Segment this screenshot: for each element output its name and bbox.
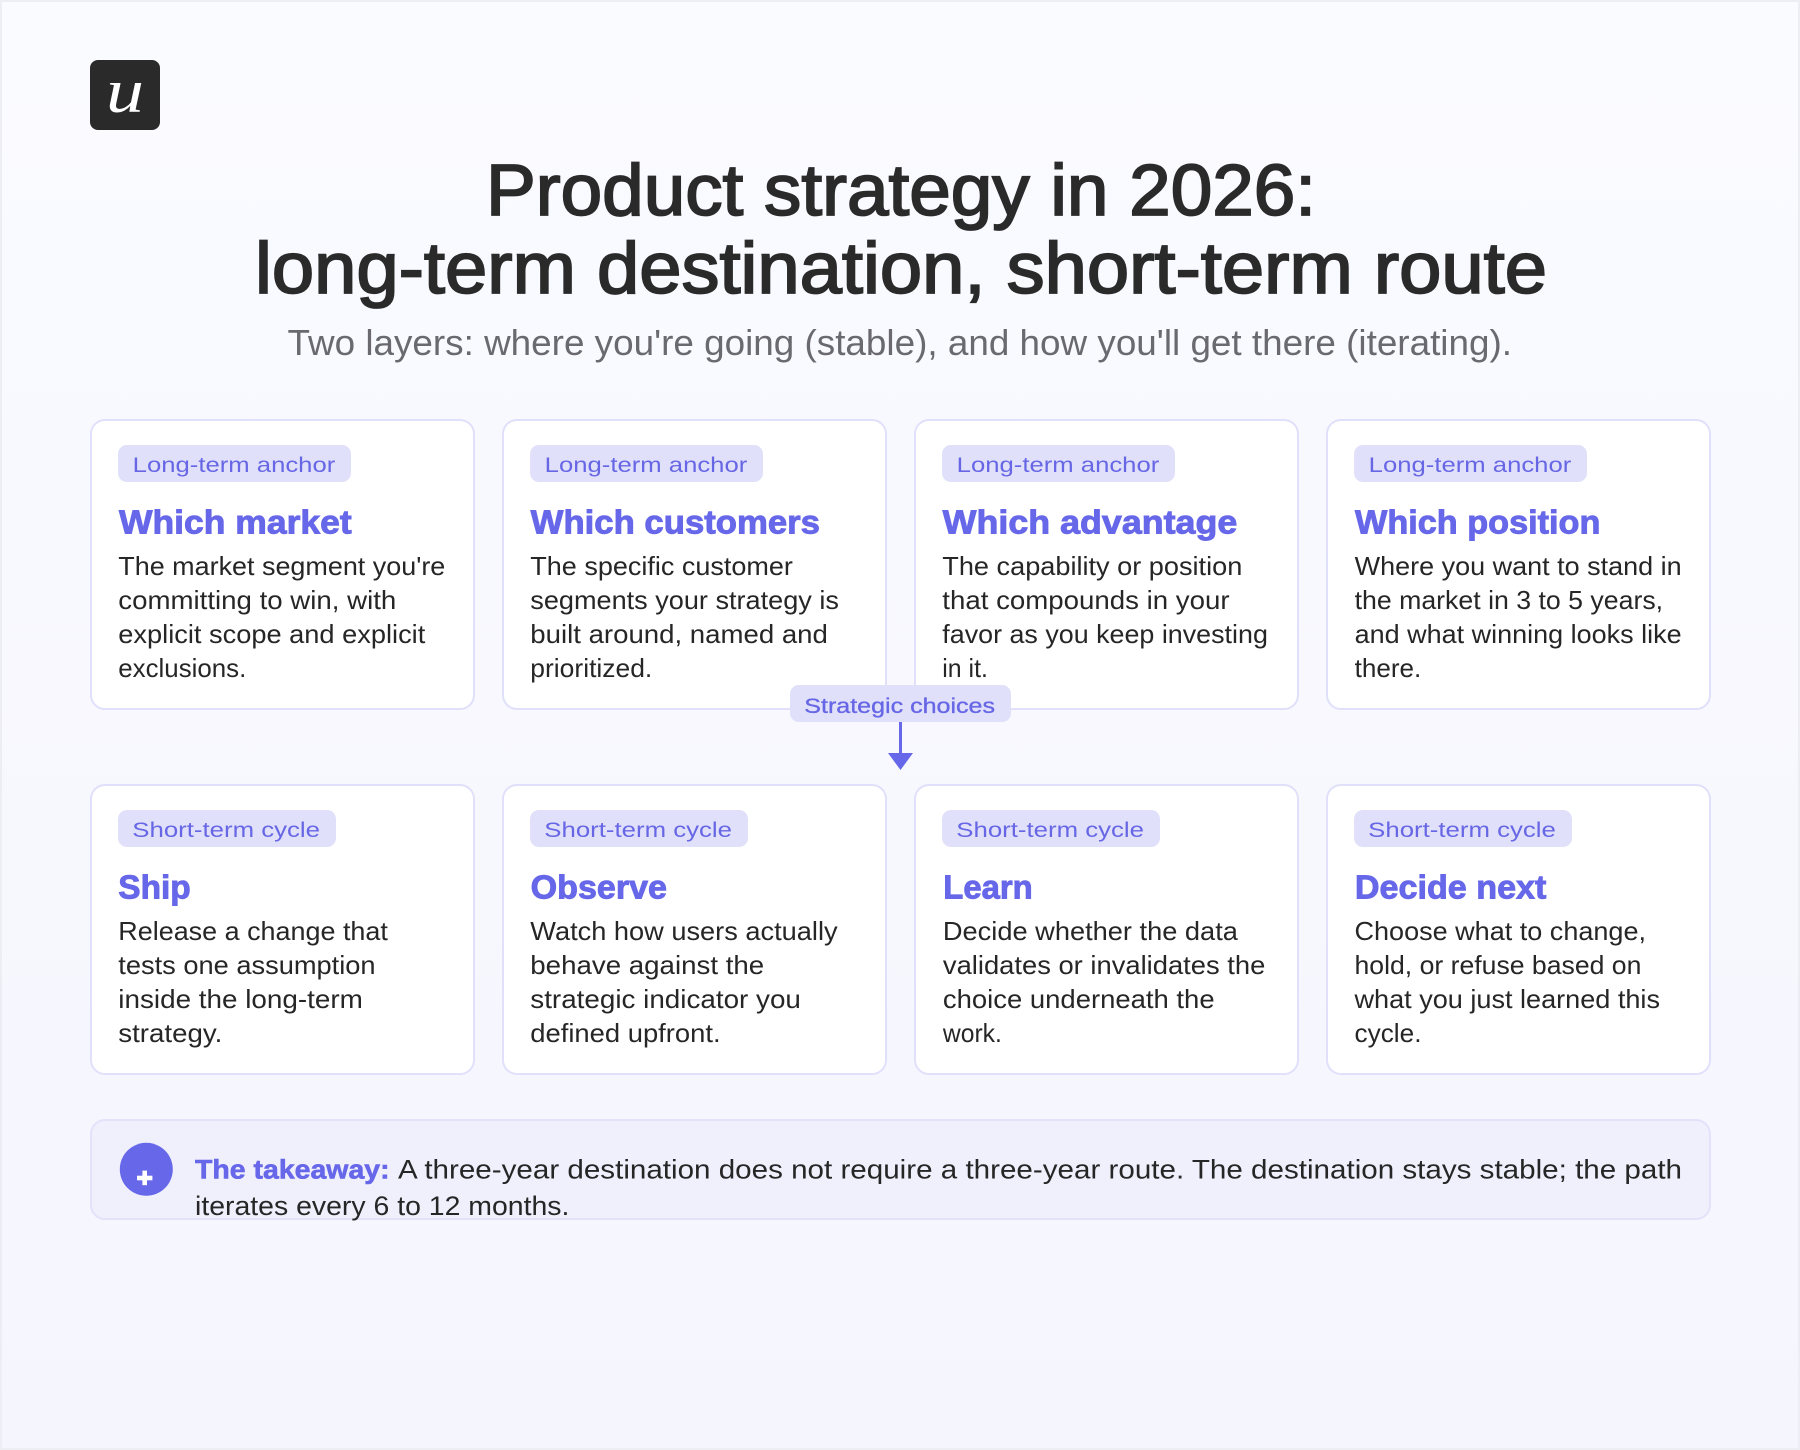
- panel: which position: [1327, 420, 1710, 709]
- body text: [118, 916, 389, 1048]
- body text: Watch how users actually: [530, 916, 838, 946]
- tag: long-term anchor: [942, 445, 1175, 482]
- body text: [942, 916, 1265, 1048]
- tag: long-term anchor: Long-term anchor: [545, 453, 747, 477]
- arrow: strategic choices to short-term cycle: [888, 722, 913, 770]
- body text: in it.: [942, 653, 988, 683]
- body text: strategic indicator you: [530, 984, 801, 1014]
- title: Product strategy in 2026:: [486, 151, 1316, 231]
- takeaway text: iterates every 6 to 12 months.: [195, 1191, 569, 1221]
- body text: favor as you keep investing: [942, 619, 1268, 649]
- body text: Choose what to change,: [1355, 916, 1646, 946]
- takeaway text: The takeaway:: [195, 1154, 390, 1184]
- body text: [942, 551, 1268, 683]
- body text: tests one assumption: [118, 950, 376, 980]
- body text: Release a change that: [118, 916, 389, 946]
- body text: [530, 551, 839, 683]
- body text: cycle.: [1355, 1018, 1422, 1048]
- tag: strategic choices: [790, 685, 1011, 722]
- body text: there.: [1355, 653, 1421, 683]
- icon: logo: [90, 58, 160, 130]
- body text: defined upfront.: [530, 1018, 721, 1048]
- body text: The capability or position: [942, 551, 1242, 581]
- body text: prioritized.: [530, 653, 652, 683]
- tag: long-term anchor: Long-term anchor: [957, 453, 1159, 477]
- heading: Which market: [119, 503, 352, 540]
- heading: Which advantage: [943, 503, 1237, 540]
- tag: long-term anchor: [530, 445, 763, 482]
- body text: [118, 551, 445, 683]
- panel: which customers: [503, 420, 886, 709]
- takeaway text: [195, 1154, 1682, 1221]
- tag: short-term cycle: Short-term cycle: [1368, 818, 1556, 842]
- panel: decide next: [1327, 785, 1710, 1074]
- tag: long-term anchor: Long-term anchor: [1369, 453, 1571, 477]
- body text: strategy.: [118, 1018, 222, 1048]
- body text: The market segment you're: [118, 551, 445, 581]
- title: [255, 151, 1547, 309]
- body text: exclusions.: [118, 653, 246, 683]
- heading: Learn: [943, 868, 1033, 905]
- body text: [1353, 916, 1660, 1048]
- body text: work.: [942, 1018, 1002, 1048]
- panel: ship: [91, 785, 474, 1074]
- tag: short-term cycle: [1354, 810, 1572, 847]
- tag: strategic choices: Strategic choices: [804, 694, 995, 718]
- panel: which advantage: [915, 420, 1298, 709]
- tag: short-term cycle: [530, 810, 748, 847]
- icon: plus badge: [120, 1143, 173, 1196]
- body text: that compounds in your: [942, 585, 1230, 615]
- panel: which market: [91, 420, 474, 709]
- body text: behave against the: [530, 950, 764, 980]
- heading: Decide next: [1355, 868, 1546, 905]
- body text: [1355, 551, 1682, 683]
- body text: Where you want to stand in: [1355, 551, 1682, 581]
- body text: explicit scope and explicit: [118, 619, 426, 649]
- callout: takeaway: [91, 1120, 1710, 1221]
- heading: Which position: [1355, 503, 1600, 540]
- body text: [530, 916, 838, 1048]
- tag: short-term cycle: Short-term cycle: [544, 818, 732, 842]
- tag: short-term cycle: [118, 810, 336, 847]
- tag: short-term cycle: [942, 810, 1160, 847]
- body text: Decide whether the data: [943, 916, 1238, 946]
- body text: choice underneath the: [943, 984, 1215, 1014]
- body text: validates or invalidates the: [943, 950, 1265, 980]
- body text: and what winning looks like: [1355, 619, 1682, 649]
- panel: observe: [503, 785, 886, 1074]
- subtitle: Two layers: where you're going (stable), and how you'll get there (iterating).: [288, 322, 1512, 363]
- icon: logo: u: [106, 58, 144, 126]
- body text: inside the long-term: [118, 984, 363, 1014]
- takeaway text: A three-year destination does not require a three-year route. The destination stays stable; the path: [398, 1154, 1682, 1184]
- tag: long-term anchor: [1354, 445, 1587, 482]
- tag: long-term anchor: [118, 445, 351, 482]
- body text: what you just learned this: [1353, 984, 1660, 1014]
- title: long-term destination, short-term route: [255, 229, 1547, 309]
- body text: the market in 3 to 5 years,: [1355, 585, 1663, 615]
- body text: segments your strategy is: [530, 585, 839, 615]
- heading: Observe: [531, 868, 667, 905]
- heading: Ship: [118, 868, 191, 905]
- body text: The specific customer: [530, 551, 793, 581]
- tag: short-term cycle: Short-term cycle: [132, 818, 320, 842]
- tag: short-term cycle: Short-term cycle: [956, 818, 1144, 842]
- heading: Which customers: [531, 503, 820, 540]
- body text: built around, named and: [530, 619, 828, 649]
- body text: hold, or refuse based on: [1355, 950, 1641, 980]
- body text: committing to win, with: [118, 585, 396, 615]
- tag: long-term anchor: Long-term anchor: [133, 453, 335, 477]
- panel: learn: [915, 785, 1298, 1074]
